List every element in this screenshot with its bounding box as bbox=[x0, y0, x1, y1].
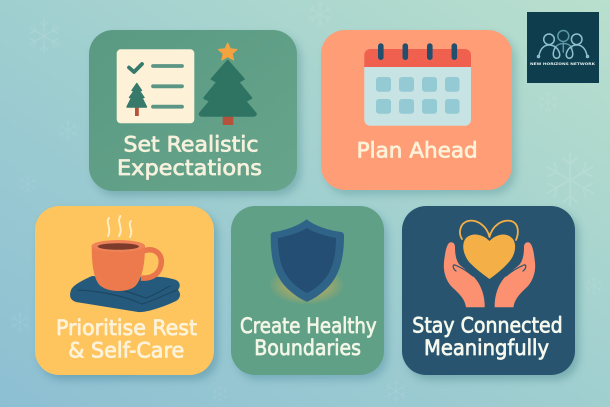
icon: right hand bbox=[495, 242, 535, 307]
heading: prioritise rest: Prioritise Rest bbox=[56, 316, 197, 340]
heading: stay connected: Stay Connected bbox=[412, 314, 563, 338]
logo: new horizons network bbox=[527, 12, 599, 83]
icon: checklist bbox=[117, 49, 194, 123]
heading: boundaries: Boundaries bbox=[254, 336, 361, 360]
panel: set realistic expectations bbox=[89, 30, 301, 196]
icon: blanket bbox=[70, 276, 180, 312]
icon: left hand bbox=[444, 242, 485, 307]
heading: and self-care: & Self-Care bbox=[68, 338, 184, 362]
icon: three people bbox=[538, 30, 588, 58]
icon: shield bbox=[271, 219, 344, 302]
panel: prioritise rest and self-care bbox=[35, 206, 218, 380]
heading: set realistic: Set Realistic bbox=[124, 133, 258, 157]
heading: create healthy: Create Healthy bbox=[240, 314, 377, 338]
icon: christmas tree bbox=[200, 43, 256, 125]
heading: expectations: Expectations bbox=[117, 156, 262, 180]
panel: stay connected meaningfully bbox=[402, 206, 579, 380]
heading: plan ahead: Plan Ahead bbox=[357, 138, 478, 162]
icon: calendar bbox=[364, 43, 471, 126]
heading: meaningfully: Meaningfully bbox=[424, 336, 549, 360]
panel: create healthy boundaries bbox=[231, 206, 388, 380]
panel: plan ahead bbox=[321, 30, 516, 195]
icon: glow bbox=[269, 265, 345, 305]
icon: heart with loops bbox=[460, 221, 518, 279]
logo text: NEW HORIZONS NETWORK bbox=[530, 61, 596, 66]
icon: mug with steam bbox=[92, 216, 161, 291]
